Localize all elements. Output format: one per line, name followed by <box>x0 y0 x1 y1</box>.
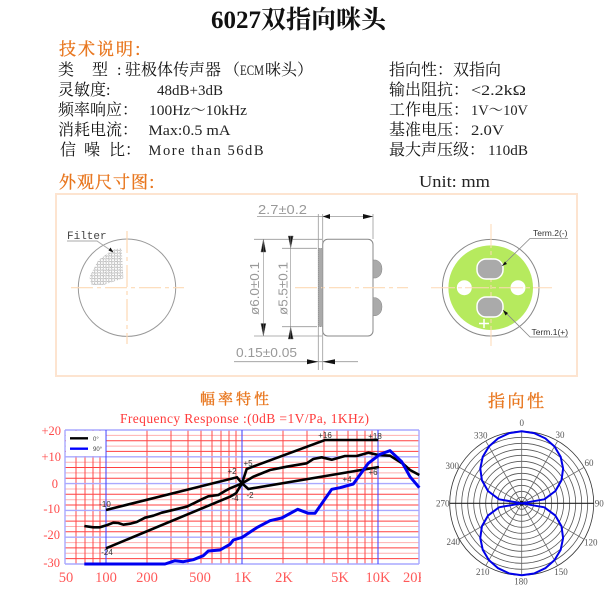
chart: frequency response <box>65 430 419 564</box>
chart y axis labels: -20 <box>43 528 60 542</box>
spec: operating voltage: 1V～10V <box>471 103 529 119</box>
spec: frequency response: 100Hz～10kHz <box>149 103 248 119</box>
spec: type: （ <box>224 62 240 79</box>
spec: type: : <box>117 62 121 79</box>
curve annotations: +4 <box>342 475 352 484</box>
polar angle labels: 30 <box>556 430 565 440</box>
polar angle labels: 210 <box>476 567 490 577</box>
curve annotations: +2 <box>227 467 237 476</box>
label: thickness: 0.15±0.05 <box>236 346 297 360</box>
curve annotations: +16 <box>318 431 332 440</box>
spec: current consumption: 消耗电流： <box>58 121 138 139</box>
spec: output impedance <box>389 81 526 99</box>
spec: type <box>58 60 313 79</box>
hole right <box>510 280 526 295</box>
curve annotations: +6 <box>368 468 378 477</box>
spec: type: 型 <box>92 61 108 79</box>
chart x axis labels: 2K <box>275 570 293 586</box>
arrow: diameter 6.0 <box>261 239 266 336</box>
polar angle labels: 330 <box>474 430 488 440</box>
spec: signal to noise: 信 <box>60 141 76 159</box>
chart x axis labels: 20K <box>403 570 428 586</box>
chart y axis labels: -10 <box>43 502 60 516</box>
plus mark <box>479 319 489 328</box>
chart x axis labels <box>60 572 421 582</box>
chart x axis labels: 100 <box>95 570 117 586</box>
filter layer <box>319 248 323 327</box>
terminal pin upper <box>373 260 382 278</box>
chart x axis labels: 5K <box>331 570 349 586</box>
spec: frequency response: 频率响应： <box>58 101 138 119</box>
curve annotations: -4 <box>231 494 239 503</box>
curve annotations: -24 <box>101 548 113 557</box>
spec: current consumption: Max:0.5 mA <box>148 123 231 139</box>
polar angle labels <box>436 418 604 586</box>
spec: sensitivity: 灵敏度: <box>58 81 110 99</box>
label: diameter 6.0: ø6.0±0.1 <box>248 262 262 315</box>
chart y axis labels <box>41 424 61 570</box>
spec: type: 咪头 <box>265 61 298 79</box>
arrow: thickness dimension <box>307 359 335 364</box>
chart x axis labels: 500 <box>189 570 211 586</box>
label: terminal 1: Term.1(+) <box>532 327 568 337</box>
curve annotations <box>99 431 382 557</box>
spec: signal to noise: 噪 <box>84 141 100 159</box>
polar angle labels: 60 <box>584 458 594 468</box>
heading: directivity: 指向性 <box>488 387 546 412</box>
spec: signal to noise <box>60 141 264 159</box>
title: 6027双指向咪头 <box>211 5 388 34</box>
spec: output impedance: <2.2kΩ <box>471 83 526 99</box>
heading: technical description: 技术说明: <box>59 35 143 60</box>
curve annotations: -2 <box>246 491 254 500</box>
text block: right specifications <box>389 61 529 159</box>
heading: dimensions: 外观尺寸图: <box>59 168 156 193</box>
arrow: diameter 5.5 <box>288 236 293 339</box>
polar angle labels: 0 <box>519 418 524 428</box>
spec: maximum SPL <box>389 140 528 159</box>
curve: 0 degree response <box>84 453 419 527</box>
chart y axis labels: +20 <box>41 424 61 438</box>
spec: type: ） <box>297 62 313 79</box>
drawing: side view <box>234 203 408 370</box>
terminal pin lower <box>373 298 382 316</box>
chart y axis labels: -30 <box>43 556 60 570</box>
curve: 90 degree response <box>84 451 419 564</box>
unit label: Unit: mm <box>419 172 490 191</box>
lower tolerance limit <box>106 467 379 548</box>
drawing: terminal view <box>431 224 568 346</box>
legend: 0° <box>93 437 99 443</box>
chart: polar pattern <box>436 418 604 586</box>
polar angle labels: 150 <box>554 567 568 577</box>
chart x axis labels: 1K <box>234 570 252 586</box>
curve: figure-eight pattern <box>480 431 563 575</box>
chart x axis labels: 200 <box>136 570 158 586</box>
panel: dimension drawings <box>56 194 577 376</box>
filter mesh <box>89 248 123 285</box>
chart x axis labels: 10K <box>366 570 391 586</box>
spec: directivity: 指向性：双指向 <box>389 61 501 79</box>
label: terminal 2: Term.2(-) <box>533 228 568 238</box>
chart y axis labels: 0 <box>52 477 58 491</box>
spec: sensitivity <box>58 81 223 99</box>
spec: operating voltage: 工作电压： <box>389 101 469 119</box>
polar angle labels: 90 <box>595 498 604 508</box>
spec: type: 驻极体传声器 <box>125 60 221 79</box>
spec: output impedance: 输出阻抗： <box>389 81 469 99</box>
polar angle labels: 120 <box>584 538 598 548</box>
heading: frequency characteristics: 幅率特性 <box>200 388 272 409</box>
spec: current consumption <box>58 121 231 139</box>
polar angle labels: 300 <box>446 461 460 471</box>
spec: signal to noise: More than 56dB <box>148 143 264 159</box>
spec: operating voltage <box>389 101 529 119</box>
terminal 2 pad <box>477 259 503 279</box>
spec: type: ECM <box>240 63 264 79</box>
polar angle labels: 270 <box>436 498 450 508</box>
spec: sensitivity: 48dB+3dB <box>157 83 223 99</box>
curve annotations: +5 <box>243 459 253 468</box>
spec: reference voltage: 基准电压： <box>389 121 469 139</box>
chart title: frequency response: Frequency Response :(0dB =1V/Pa, 1KHz) <box>120 411 369 426</box>
spec: reference voltage <box>389 121 505 139</box>
label: diameter 5.5: ø5.5±0.1 <box>276 262 290 315</box>
spec: maximum SPL: 最大声压级： <box>389 140 485 159</box>
polar angle labels: 240 <box>447 537 461 547</box>
polar angle labels: 180 <box>514 576 528 586</box>
text block: left specifications <box>58 60 313 159</box>
curve annotations: +18 <box>368 432 382 441</box>
spec: type: 类 <box>58 61 74 79</box>
chart x axis labels: 50 <box>59 570 73 586</box>
hole left <box>457 280 472 295</box>
legend <box>66 431 106 456</box>
curve annotations: -10 <box>99 500 111 509</box>
filter label: Filter <box>67 231 107 243</box>
spec: frequency response <box>58 101 248 119</box>
spec: signal to noise: 比： <box>109 141 141 159</box>
drawing: front view with filter <box>67 231 184 344</box>
upper tolerance limit <box>106 440 378 510</box>
legend: 90° <box>93 447 103 453</box>
terminal 1 pad <box>477 297 503 317</box>
label: width: 2.7±0.2 <box>258 203 307 217</box>
chart y axis labels: +10 <box>41 450 61 464</box>
spec: maximum SPL: 110dB <box>488 143 528 159</box>
arrow: width dimension <box>323 214 373 219</box>
spec: reference voltage: 2.0V <box>471 123 505 139</box>
